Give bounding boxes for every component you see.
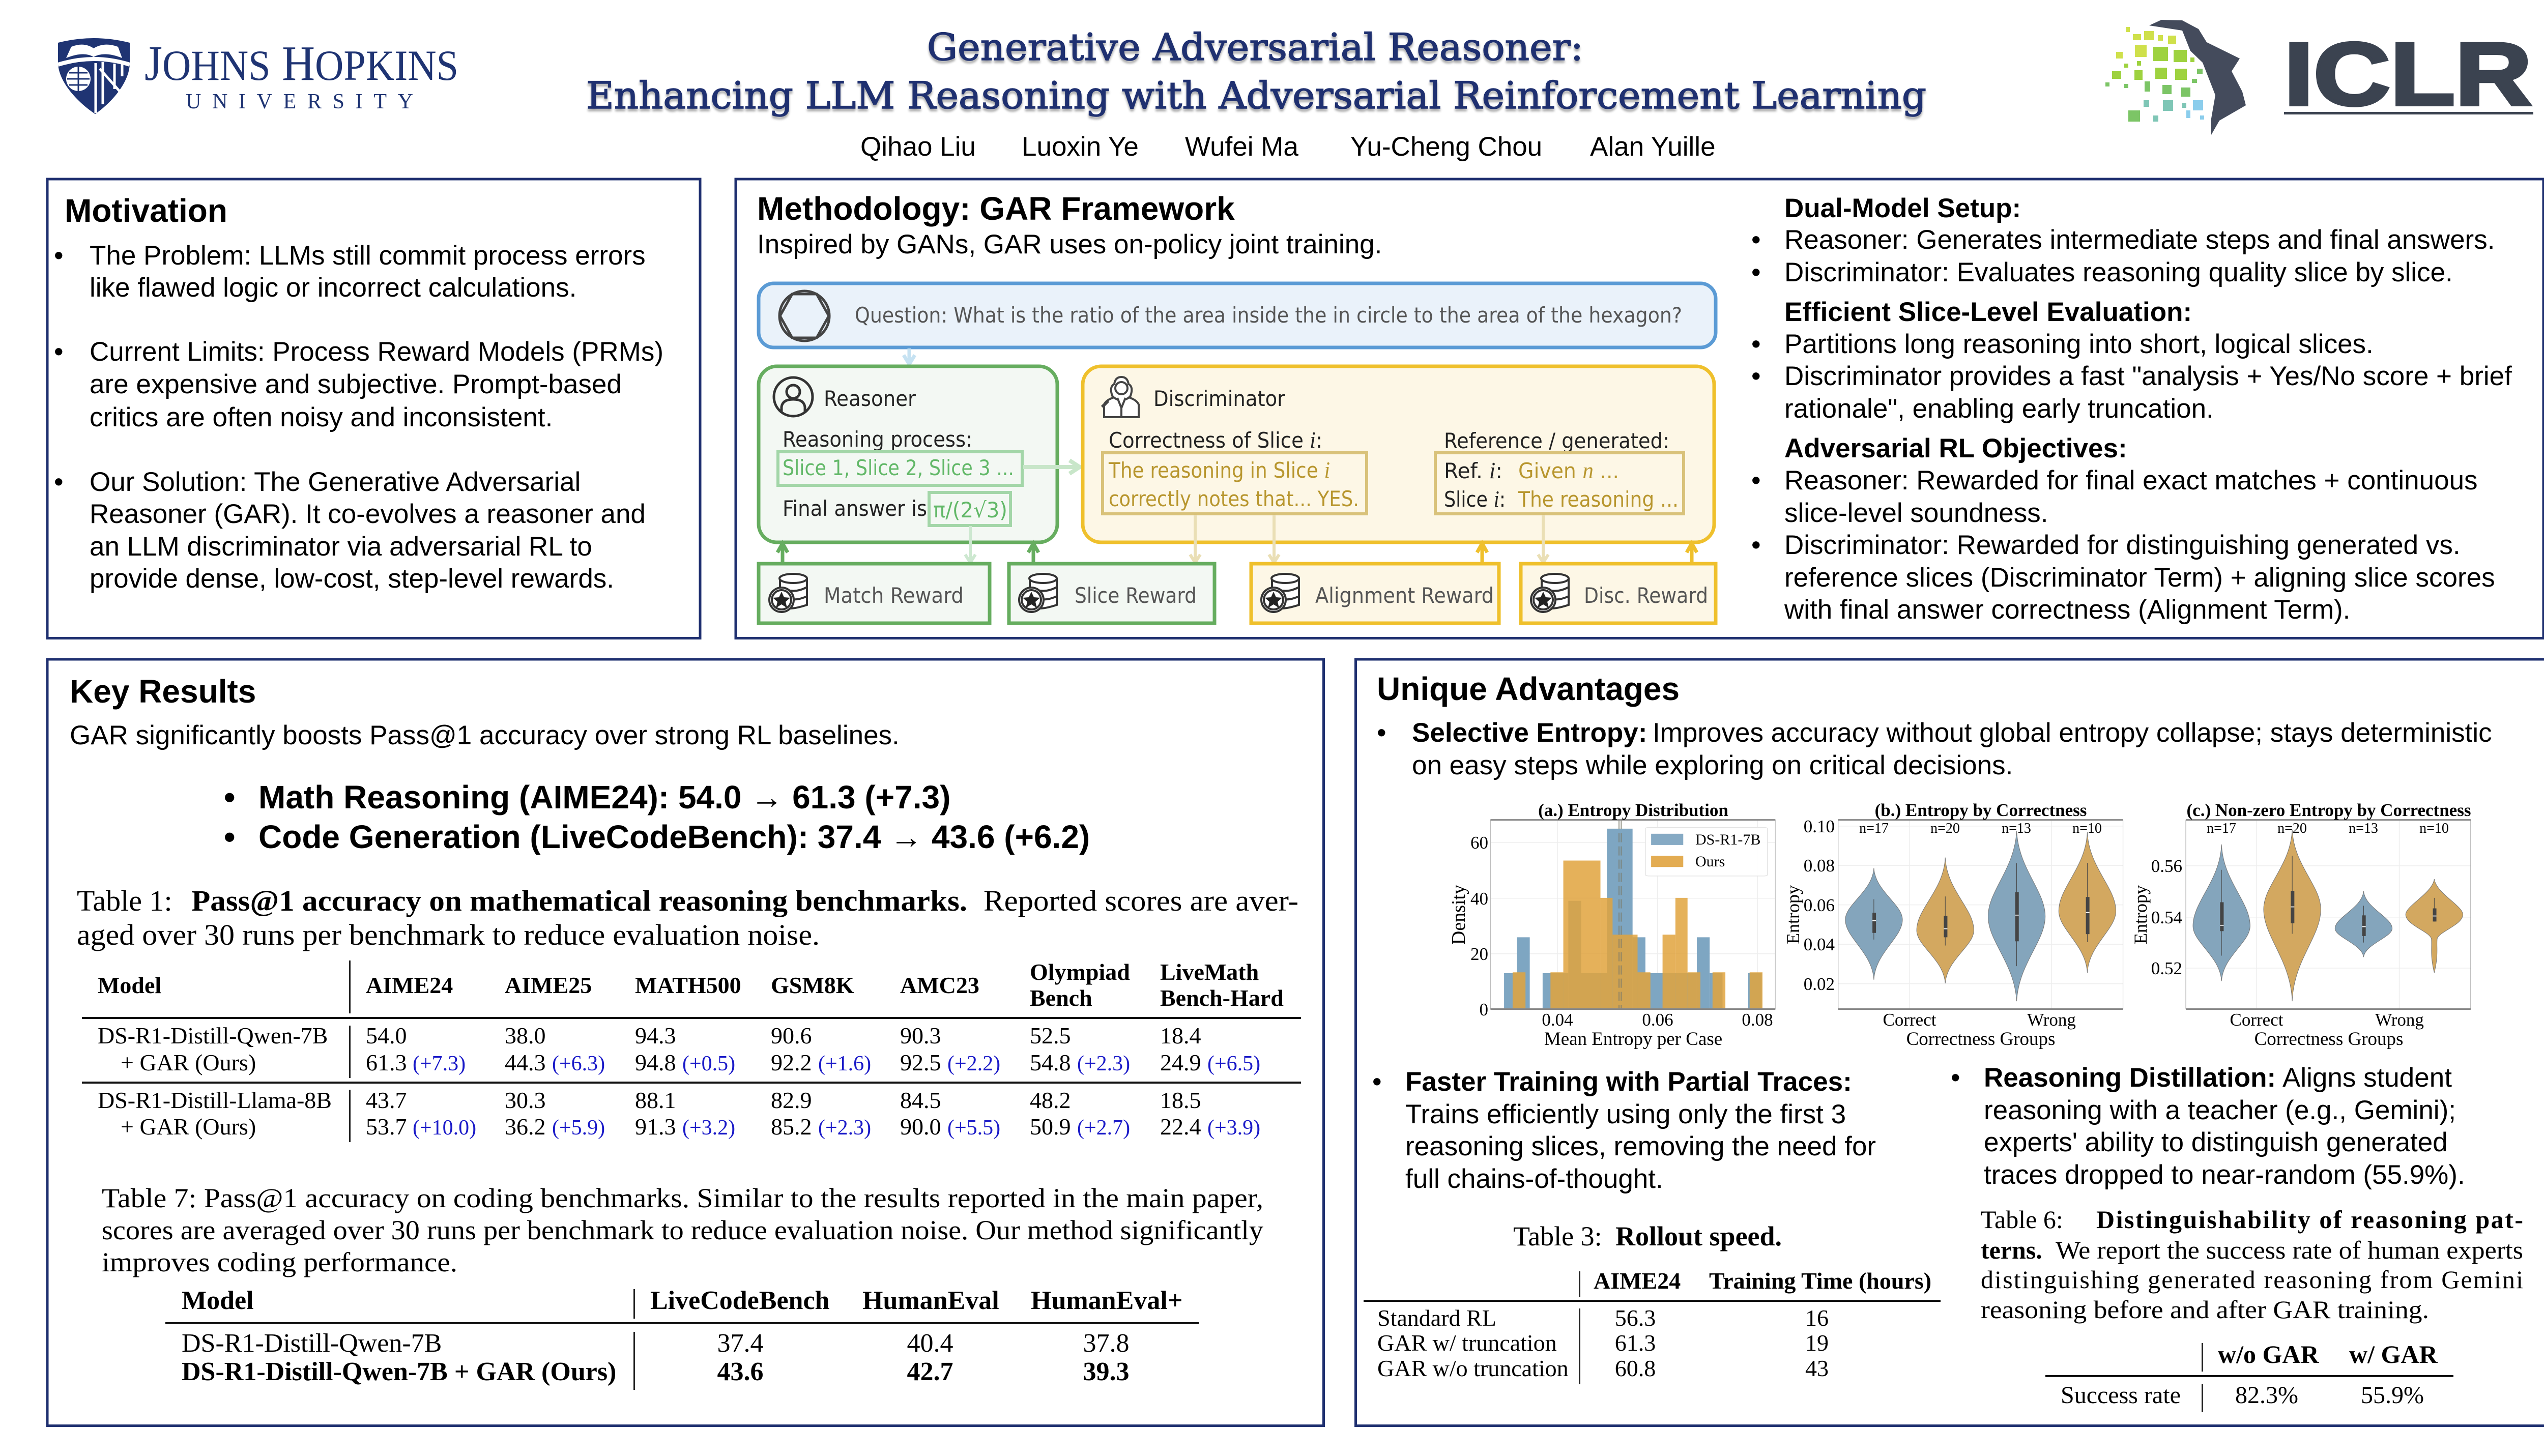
table 1 rows: Qwen-7B: 92.5	[900, 1050, 941, 1075]
logo: ICLR	[2105, 20, 2533, 135]
table 3: rollout speed: AIME24	[1594, 1268, 1681, 1294]
reward box: discriminator	[1521, 564, 1716, 623]
table 1 rows: Llama-8B: 48.2	[1030, 1087, 1071, 1113]
subtitle: GAR significantly boosts Pass@1 accuracy over strong RL baselines.	[70, 720, 900, 750]
logo underline	[2284, 112, 2533, 114]
chart b y ticks: 0.10	[1804, 817, 1835, 836]
chart a axis labels: Density	[1448, 885, 1469, 945]
text block: faster training: reasoning slices, removing the need for	[1405, 1131, 1876, 1161]
label: reasoning process: Reasoning process:	[783, 427, 972, 452]
chart c y ticks: 0.54	[2151, 908, 2182, 927]
reward box: alignment	[1251, 564, 1499, 623]
chart a axis labels	[1448, 885, 1722, 1050]
reward box: slice	[1009, 564, 1215, 623]
table 7 caption: Table 7: Pass@1 accuracy on coding benchmarks. Similar to the results reported in the main paper,	[102, 1183, 1263, 1213]
authors: Qihao Liu	[860, 132, 976, 162]
slices box	[778, 452, 1022, 485]
table 3: rollout speed: 16	[1805, 1305, 1829, 1331]
chart b y ticks: 0.02	[1804, 974, 1835, 994]
table 6: distinguishability: 82.3%	[2235, 1382, 2298, 1409]
table 1 rows: Llama-8B: 50.9	[1030, 1114, 1071, 1140]
chart c x ticks: Wrong	[2375, 1010, 2424, 1030]
arrow: question to reasoner	[904, 348, 915, 364]
table 1 rows: Llama-8B: + GAR (Ours)	[121, 1114, 256, 1140]
table 1 header: LiveMath	[1160, 959, 1259, 985]
table 1 rows: Qwen-7B: (+2.2)	[947, 1052, 1000, 1075]
table 1 caption: Pass@1 accuracy on mathematical reasoning benchmarks.	[191, 884, 967, 917]
label: reference: Reference / generated:	[1444, 428, 1669, 453]
table 1 rows: Llama-8B: 36.2	[505, 1114, 545, 1140]
table 1 rows: Llama-8B: 30.3	[505, 1087, 545, 1113]
table 1 rows: Qwen-7B: 90.6	[771, 1023, 812, 1049]
heading: Unique Advantages	[1377, 671, 1680, 707]
table 1 rows: Llama-8B: (+2.3)	[818, 1116, 871, 1140]
chart a x ticks: 0.08	[1742, 1010, 1773, 1030]
violin c4	[2406, 879, 2463, 973]
reference box	[1435, 453, 1684, 514]
panel: unique advantages	[1355, 659, 2544, 1425]
chart a y ticks: 60	[1470, 833, 1488, 853]
icon: hexagon in circle	[779, 291, 829, 341]
icon: person	[774, 377, 813, 416]
answer box: π/(2√3)	[933, 498, 1007, 522]
text block: slice-level evaluation: •	[1751, 361, 1761, 391]
chart a legend labels: Ours	[1695, 853, 1725, 870]
table 7: coding benchmarks: LiveCodeBench	[650, 1286, 830, 1315]
text block: reasoning distillation: •	[1951, 1063, 1960, 1093]
reasoner panel	[759, 366, 1057, 542]
logo subtitle: UNIVERSITY	[186, 90, 413, 113]
label: Discriminator	[1153, 386, 1286, 411]
reference box: Slice i:	[1444, 486, 1506, 512]
table 7: coding benchmarks: DS-R1-Distill-Qwen-7B + GAR (Ours)	[182, 1357, 616, 1386]
chart b axis labels	[1783, 885, 2055, 1050]
table 1 rows: Llama-8B: 88.1	[635, 1087, 676, 1113]
table 3: rollout speed: 43	[1805, 1355, 1829, 1381]
text block: adversarial objectives: •	[1751, 530, 1761, 560]
reward box: discriminator: Disc. Reward	[1584, 583, 1708, 608]
text block: faster training: full chains-of-thought.	[1405, 1164, 1663, 1194]
chart a x ticks	[1542, 1010, 1773, 1030]
text block: dual-model setup: Dual-Model Setup:	[1784, 193, 2021, 223]
chart a legend labels: DS-R1-7B	[1695, 831, 1760, 848]
table 6: distinguishability: w/ GAR	[2349, 1340, 2438, 1368]
table 1 rows: Qwen-7B: (+6.5)	[1207, 1052, 1260, 1075]
text block: selective entropy: Selective Entropy:	[1412, 718, 1647, 748]
text block: our solution: an LLM discriminator via adversarial RL to	[90, 532, 592, 562]
chart b plot area	[1838, 820, 2123, 1009]
table 1 header: Bench-Hard	[1160, 985, 1284, 1011]
text block: adversarial objectives: slice-level soundness.	[1784, 498, 2048, 528]
callout: headline results	[224, 779, 1090, 855]
title: Enhancing LLM Reasoning with Adversarial Reinforcement Learning	[586, 74, 1926, 118]
chart a y ticks	[1470, 833, 1488, 1020]
table 1 rows: Qwen-7B: 92.2	[771, 1050, 812, 1075]
chart a y ticks: 40	[1470, 889, 1488, 909]
authors: Yu-Cheng Chou	[1350, 132, 1542, 162]
heading: Methodology: GAR Framework	[757, 190, 1235, 227]
text block: reasoning distillation: traces dropped to near-random (55.9%).	[1984, 1160, 2465, 1190]
table 1 rows: Qwen-7B: (+1.6)	[818, 1052, 871, 1075]
text block: faster training	[1372, 1067, 1876, 1194]
chart: entropy distribution histogram	[1448, 800, 1775, 1050]
callout: headline results: Math Reasoning (AIME24): 54.0 → 61.3 (+7.3)	[258, 779, 950, 816]
table 3: rollout speed	[1364, 1268, 1941, 1384]
table 3: rollout speed: Training Time (hours)	[1709, 1268, 1931, 1294]
text block: slice-level evaluation: Partitions long reasoning into short, logical slices.	[1784, 329, 2374, 359]
logo: Johns Hopkins University	[58, 36, 458, 114]
table 7: coding benchmarks: DS-R1-Distill-Qwen-7B	[182, 1329, 442, 1358]
table 1 rows: Llama-8B: 18.5	[1160, 1087, 1201, 1113]
chart c axis labels: Correctness Groups	[2254, 1029, 2403, 1050]
violin b3	[1988, 831, 2045, 1001]
violin c3	[2335, 891, 2392, 957]
table 1 rows: Llama-8B	[98, 1087, 1260, 1140]
chart a title: (a.) Entropy Distribution	[1538, 800, 1728, 820]
text block: current limits: •	[54, 337, 64, 367]
reference box: Ref. i:	[1444, 457, 1502, 483]
authors	[860, 132, 1716, 162]
table 1 header: Olympiad	[1030, 959, 1130, 985]
table 6 caption: Table 6:	[1981, 1205, 2063, 1234]
table 1 header: AIME24	[366, 972, 453, 998]
table 6: distinguishability: 55.9%	[2361, 1382, 2424, 1409]
correctness box: correctly notes that... YES.	[1109, 486, 1359, 511]
callout: headline results: •	[224, 779, 235, 816]
table 1 header: AMC23	[900, 972, 979, 998]
chart a axis labels: Mean Entropy per Case	[1544, 1029, 1722, 1050]
text block: dual-model setup: •	[1751, 257, 1761, 287]
table 6 caption: reasoning before and after GAR training.	[1981, 1295, 2429, 1324]
table 3: rollout speed: 56.3	[1615, 1305, 1656, 1331]
chart c sample sizes: n=13	[2349, 821, 2378, 836]
text block: current limits: are expensive and subjective. Prompt-based	[90, 369, 622, 399]
text block: adversarial objectives: •	[1751, 465, 1761, 496]
table 3: rollout speed: 61.3	[1615, 1330, 1656, 1356]
chart c plot area	[2186, 820, 2471, 1009]
table 6: distinguishability: Success rate	[2061, 1382, 2181, 1409]
table 1 rows: Qwen-7B: (+2.3)	[1077, 1052, 1130, 1075]
table 6 caption: terns.	[1981, 1236, 2042, 1264]
arrows: reward flows	[777, 515, 1697, 563]
violin b1	[1845, 868, 1902, 980]
text block: the problem: The Problem: LLMs still commit process errors	[90, 241, 646, 271]
table 1 rows: Qwen-7B: 94.3	[635, 1023, 676, 1049]
text block: slice-level evaluation: •	[1751, 329, 1761, 359]
table 1 rows: Llama-8B: 90.0	[900, 1114, 941, 1140]
text block: the problem	[54, 241, 646, 303]
table 1 rows: Llama-8B: DS-R1-Distill-Llama-8B	[98, 1087, 332, 1113]
table 1 rows: Llama-8B: 22.4	[1160, 1114, 1201, 1140]
table 7: coding benchmarks: 40.4	[907, 1329, 953, 1358]
table 1 caption: aged over 30 runs per benchmark to reduce evaluation noise.	[77, 918, 820, 951]
text block: faster training: •	[1372, 1067, 1382, 1097]
text block: our solution: •	[54, 467, 64, 497]
chart b axis labels: Entropy	[1783, 885, 1803, 944]
text block: the problem: •	[54, 241, 64, 271]
table 6 caption: We report the success rate of human experts	[2056, 1236, 2523, 1264]
table 1 header: Model	[98, 972, 161, 998]
table 7: coding benchmarks	[165, 1286, 1199, 1390]
text block: slice-level evaluation: Efficient Slice-Level Evaluation:	[1784, 297, 2192, 327]
text block: faster training: Trains efficiently using only the first 3	[1405, 1099, 1846, 1129]
chart c sample sizes	[2207, 821, 2449, 836]
table 1 rows: Qwen-7B: 38.0	[505, 1023, 545, 1049]
table 6 caption	[1981, 1205, 2523, 1324]
chart a x ticks: 0.04	[1542, 1010, 1573, 1030]
text block: slice-level evaluation: rationale", enabling early truncation.	[1784, 394, 2214, 424]
heading: Key Results	[70, 673, 256, 710]
table 3: rollout speed: Standard RL	[1377, 1305, 1496, 1331]
chart c axis labels	[2130, 885, 2403, 1050]
table 7 caption: scores are averaged over 30 runs per benchmark to reduce evaluation noise. Our method significantly	[102, 1215, 1263, 1245]
label: correctness: Correctness of Slice i:	[1109, 427, 1322, 453]
icon: JHU shield	[58, 38, 130, 114]
panel: motivation	[47, 179, 700, 638]
chart b x ticks: Wrong	[2027, 1010, 2076, 1030]
chart a legend frame	[1645, 827, 1768, 876]
chart b y ticks: 0.08	[1804, 856, 1835, 876]
table 3: rollout speed: 60.8	[1615, 1355, 1656, 1381]
table 7: coding benchmarks: 37.4	[717, 1329, 763, 1358]
chart b sample sizes: n=17	[1859, 821, 1889, 836]
chart b title: (b.) Entropy by Correctness	[1875, 800, 2087, 820]
logo text: ICLR	[2284, 25, 2532, 124]
chart c y ticks: 0.52	[2151, 958, 2182, 978]
text block: dual-model setup: Discriminator: Evaluates reasoning quality slice by slice.	[1784, 257, 2453, 287]
authors: Alan Yuille	[1590, 132, 1716, 162]
text block: the problem: like flawed logic or incorrect calculations.	[90, 273, 576, 303]
chart b y ticks: 0.06	[1804, 895, 1835, 915]
table 1 rows: Qwen-7B: 61.3	[366, 1050, 407, 1075]
table 7 caption: improves coding performance.	[102, 1247, 457, 1277]
chart b axis labels: Correctness Groups	[1906, 1029, 2055, 1050]
table 3 caption	[1513, 1221, 1782, 1251]
table 1 rows: Llama-8B: 53.7	[366, 1114, 407, 1140]
chart b x ticks	[1883, 1010, 2076, 1030]
text block: reasoning distillation: Reasoning Distillation:	[1984, 1063, 2276, 1093]
chart c x ticks	[2230, 1010, 2424, 1030]
text block: dual-model setup: •	[1751, 225, 1761, 255]
text block: selective entropy: on easy steps while exploring on critical decisions.	[1412, 750, 2013, 780]
table 7 caption	[102, 1183, 1263, 1277]
heading: Motivation	[65, 192, 227, 229]
chart b y ticks	[1804, 817, 1835, 994]
table 3: rollout speed: 19	[1805, 1330, 1829, 1356]
table 7: coding benchmarks: 43.6	[717, 1357, 763, 1386]
table 7: coding benchmarks: 42.7	[907, 1357, 953, 1386]
table 7: coding benchmarks: 37.8	[1083, 1329, 1130, 1358]
chart c y ticks: 0.56	[2151, 856, 2182, 876]
table 1 rows: Qwen-7B: + GAR (Ours)	[121, 1050, 256, 1075]
chart c sample sizes: n=20	[2277, 821, 2307, 836]
table 1 rows: Qwen-7B: 24.9	[1160, 1050, 1201, 1075]
table 1 rows: Llama-8B: (+10.0)	[413, 1116, 476, 1140]
table 1 header: AIME25	[505, 972, 592, 998]
text block: adversarial objectives	[1751, 433, 2495, 625]
table 1 rows: Qwen-7B: (+7.3)	[413, 1052, 466, 1075]
table 3: rollout speed: GAR w/o truncation	[1377, 1355, 1569, 1381]
arrow: reasoner to discriminator	[1023, 460, 1080, 474]
reference box: The reasoning ...	[1518, 487, 1679, 512]
reference box: Given n ...	[1518, 457, 1619, 483]
table 1 rows: Llama-8B: (+2.7)	[1077, 1116, 1130, 1140]
table 6 caption: Distinguishability of reasoning pat-	[2096, 1205, 2523, 1234]
text block: selective entropy	[1377, 718, 2492, 780]
chart b x ticks: Correct	[1883, 1010, 1936, 1030]
table 1 rows: Llama-8B: (+3.9)	[1207, 1116, 1260, 1140]
text block: our solution	[54, 467, 646, 594]
table 1 rows: Llama-8B: 43.7	[366, 1087, 407, 1113]
table 1 header	[98, 959, 1284, 1011]
table 1 rows: Qwen-7B: 52.5	[1030, 1023, 1071, 1049]
label: final answer: Final answer is	[783, 496, 927, 521]
chart c sample sizes: n=17	[2207, 821, 2236, 836]
text block: faster training: Faster Training with Partial Traces:	[1405, 1067, 1852, 1097]
table 6 caption: distinguishing generated reasoning from Gemini	[1981, 1265, 2523, 1294]
table 1 header: MATH500	[635, 972, 741, 998]
text block: reasoning distillation: Aligns student	[2282, 1063, 2452, 1093]
table 1 rows: Llama-8B: 91.3	[635, 1114, 676, 1140]
chart c y ticks	[2151, 856, 2182, 978]
table 1 rows: Llama-8B: (+5.9)	[552, 1116, 605, 1140]
text block: reasoning distillation: reasoning with a teacher (e.g., Gemini);	[1984, 1095, 2456, 1125]
violin c1	[2193, 845, 2250, 981]
table 3 caption: Table 3:	[1513, 1221, 1602, 1251]
callout: headline results: Code Generation (LiveCodeBench): 37.4 → 43.6 (+6.2)	[258, 819, 1090, 855]
reward box: slice: Slice Reward	[1075, 583, 1197, 608]
violin b2	[1917, 858, 1974, 983]
title: Generative Adversarial Reasoner:	[927, 26, 1583, 69]
text block: adversarial objectives: reference slices (Discriminator Term) + aligning slice scores	[1784, 563, 2495, 593]
text block: slice-level evaluation	[1751, 297, 2512, 424]
icon: judge	[1102, 377, 1139, 417]
table 1 rows: Qwen-7B: 54.0	[366, 1023, 407, 1049]
text block: current limits	[54, 337, 663, 432]
table 1 rows: Qwen-7B: 44.3	[505, 1050, 545, 1075]
table 1 header: GSM8K	[771, 972, 854, 998]
logo wordmark: JOHNS HOPKINS	[144, 36, 458, 91]
table 1 caption	[77, 884, 1298, 951]
table 1 rows: Llama-8B: 82.9	[771, 1087, 812, 1113]
text block: reasoning distillation	[1951, 1063, 2465, 1190]
chart b sample sizes: n=20	[1930, 821, 1960, 836]
text block: adversarial objectives: Adversarial RL Objectives:	[1784, 433, 2127, 463]
chart c sample sizes: n=10	[2419, 821, 2449, 836]
table 1: math benchmarks	[82, 959, 1301, 1142]
chart a plot area	[1490, 820, 1775, 1009]
chart: entropy by correctness violins	[1783, 800, 2123, 1050]
table 1 rows: Qwen-7B	[98, 1023, 1260, 1075]
table 1 rows: Qwen-7B: 94.8	[635, 1050, 676, 1075]
text block: slice-level evaluation: Discriminator provides a fast "analysis + Yes/No score + brief	[1784, 361, 2512, 391]
panel: key results	[47, 659, 1324, 1425]
chart b sample sizes	[1859, 821, 2102, 836]
text block: selective entropy: •	[1377, 718, 1386, 748]
text block: our solution: Reasoner (GAR). It co-evolves a reasoner and	[90, 499, 646, 529]
text block: adversarial objectives: Discriminator: Rewarded for distinguishing generated vs.	[1784, 530, 2461, 560]
title	[586, 26, 1926, 118]
authors: Luoxin Ye	[1022, 132, 1139, 162]
text block: our solution: Our Solution: The Generative Adversarial	[90, 467, 581, 497]
table 7: coding benchmarks: HumanEval	[862, 1286, 999, 1315]
discriminator panel	[1083, 366, 1714, 542]
chart c axis labels: Entropy	[2130, 885, 2151, 944]
text block: current limits: critics are often noisy and inconsistent.	[90, 402, 553, 432]
chart a x ticks: 0.06	[1642, 1010, 1673, 1030]
violin c2	[2264, 830, 2321, 1001]
table 1 rows: Qwen-7B: 18.4	[1160, 1023, 1201, 1049]
text block: our solution: provide dense, low-cost, step-level rewards.	[90, 564, 614, 594]
correctness box: The reasoning in Slice i	[1108, 457, 1330, 483]
text block: adversarial objectives: with final answer correctness (Alignment Term).	[1784, 595, 2350, 625]
chart: non-zero entropy violins	[2130, 800, 2471, 1050]
text block: dual-model setup	[1751, 193, 2495, 287]
question box	[759, 283, 1716, 347]
reward box: match	[759, 564, 990, 623]
subtitle: Inspired by GANs, GAR uses on-policy joint training.	[757, 229, 1382, 259]
table 1 rows: Llama-8B: 85.2	[771, 1114, 812, 1140]
text block: adversarial objectives: Reasoner: Rewarded for final exact matches + continuous	[1784, 465, 2478, 496]
chart a legend labels	[1695, 831, 1760, 870]
table 1 rows: Llama-8B: (+3.2)	[682, 1116, 735, 1140]
icon: head silhouette with pixels	[2105, 20, 2246, 135]
correctness box	[1103, 453, 1367, 514]
table 1 rows: Qwen-7B: (+6.3)	[552, 1052, 605, 1075]
table 1 caption: Reported scores are aver-	[984, 884, 1298, 917]
chart a y ticks: 20	[1470, 944, 1488, 964]
table 1 rows: Qwen-7B: 90.3	[900, 1023, 941, 1049]
table 1 rows: Qwen-7B: 54.8	[1030, 1050, 1071, 1075]
violin b4	[2059, 832, 2116, 973]
chart c title: (c.) Non-zero Entropy by Correctness	[2187, 800, 2471, 820]
chart b sample sizes: n=10	[2072, 821, 2102, 836]
table 1 caption: Table 1:	[77, 884, 172, 917]
table 1 rows: Llama-8B: 84.5	[900, 1087, 941, 1113]
text block: selective entropy: Improves accuracy without global entropy collapse; stays deterministic	[1653, 718, 2492, 748]
table 6: distinguishability: w/o GAR	[2218, 1340, 2319, 1368]
table 1 header: Bench	[1030, 985, 1092, 1011]
chart c x ticks: Correct	[2230, 1010, 2283, 1030]
callout: headline results: •	[224, 819, 235, 855]
panel: methodology	[736, 179, 2543, 638]
table 1 rows: Qwen-7B: DS-R1-Distill-Qwen-7B	[98, 1023, 328, 1049]
chart b y ticks: 0.04	[1804, 935, 1835, 954]
reward box: match: Match Reward	[824, 583, 964, 608]
chart a y ticks: 0	[1480, 1000, 1488, 1020]
table 1 rows: Llama-8B: (+5.5)	[947, 1116, 1000, 1140]
reward box: alignment: Alignment Reward	[1315, 583, 1494, 608]
table 7: coding benchmarks: Model	[182, 1286, 254, 1315]
text block: current limits: Current Limits: Process Reward Models (PRMs)	[90, 337, 663, 367]
table 3 caption: Rollout speed.	[1615, 1221, 1782, 1251]
table 3: rollout speed: GAR w/ truncation	[1377, 1330, 1557, 1356]
chart b sample sizes: n=13	[2002, 821, 2031, 836]
authors: Wufei Ma	[1185, 132, 1298, 162]
table 7: coding benchmarks: 39.3	[1083, 1357, 1130, 1386]
table 7: coding benchmarks: HumanEval+	[1031, 1286, 1182, 1315]
slices box: Slice 1, Slice 2, Slice 3 ...	[783, 455, 1014, 480]
label: Reasoner	[824, 386, 916, 411]
table 1 rows: Qwen-7B: (+0.5)	[682, 1052, 735, 1075]
text block: dual-model setup: Reasoner: Generates intermediate steps and final answers.	[1784, 225, 2495, 255]
table 6: distinguishability	[2045, 1340, 2453, 1412]
question text: Question: What is the ratio of the area inside the in circle to the area of the hexagon?	[855, 303, 1682, 328]
text block: reasoning distillation: experts' ability to distinguish generated	[1984, 1127, 2448, 1157]
